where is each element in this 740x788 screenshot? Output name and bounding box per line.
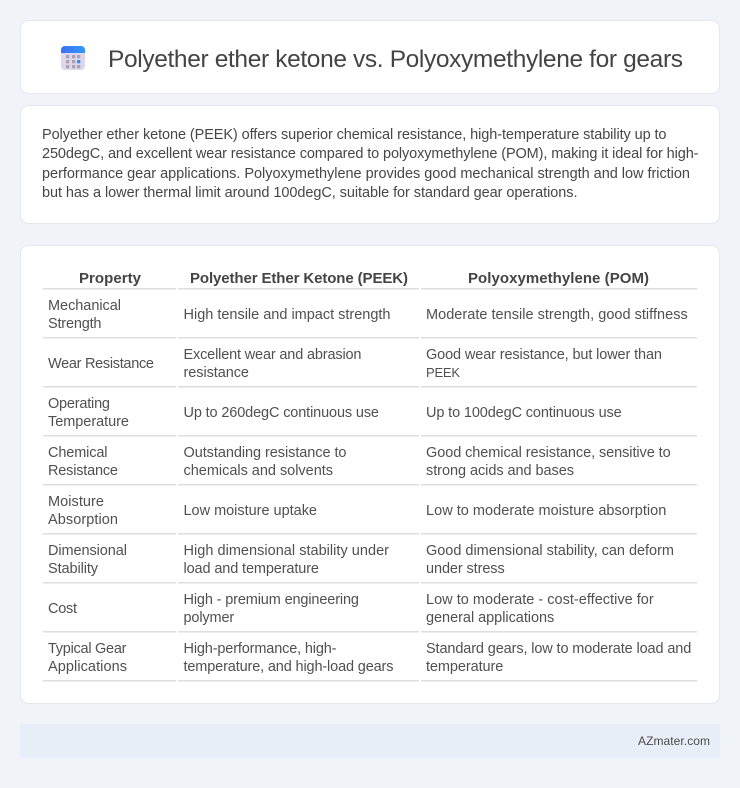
- row: chemical resistance: Outstanding resistance to: [184, 445, 346, 461]
- row: wear resistance: Wear Resistance: [48, 356, 154, 372]
- row: wear resistance: resistance: [184, 365, 249, 381]
- row: operating temperature: Up to 260degC continuous use: [184, 405, 379, 421]
- row: mechanical strength: Mechanical: [48, 298, 121, 314]
- table header row: Property: [79, 270, 142, 287]
- row: cost: High - premium engineering: [184, 592, 359, 608]
- title: Polyether ether ketone vs. Polyoxymethylene for gears: [108, 46, 683, 73]
- row: mechanical strength: Strength: [48, 316, 102, 332]
- row: mechanical strength: Moderate tensile strength, good stiffness: [426, 307, 688, 323]
- row: moisture absorption: Moisture: [48, 494, 104, 510]
- footer credit: AZmater.com: [638, 734, 710, 748]
- row: dimensional stability: Good dimensional stability, can deform: [426, 543, 674, 559]
- row: moisture absorption: Low moisture uptake: [184, 503, 317, 519]
- row: typical gear applications: Typical Gear: [48, 641, 127, 657]
- row: wear resistance: Good wear resistance, but lower than: [426, 347, 662, 363]
- row: dimensional stability: load and temperature: [184, 561, 319, 577]
- row: typical gear applications: Applications: [48, 659, 127, 675]
- row: operating temperature: Temperature: [48, 414, 129, 430]
- row: cost: polymer: [184, 610, 234, 626]
- row: chemical resistance: [43, 445, 697, 486]
- row: moisture absorption: Absorption: [48, 512, 118, 528]
- row: wear resistance: Excellent wear and abrasion: [184, 347, 362, 363]
- row: dimensional stability: [43, 543, 697, 584]
- summary paragraph: but has a lower thermal limit around 100degC, suitable for standard gear operations.: [42, 185, 578, 201]
- table header row: Polyoxymethylene (POM): [468, 270, 649, 287]
- row: cost: Low to moderate - cost-effective for: [426, 592, 654, 608]
- row: operating temperature: Up to 100degC continuous use: [426, 405, 622, 421]
- row: typical gear applications: Standard gears, low to moderate load and: [426, 641, 691, 657]
- row: moisture absorption: Low to moderate moisture absorption: [426, 503, 666, 519]
- row: chemical resistance: Chemical: [48, 445, 108, 461]
- row: typical gear applications: temperature: [426, 659, 503, 675]
- icon: calendar: [61, 46, 85, 70]
- title card: [20, 20, 720, 94]
- table header row: Polyether Ether Ketone (PEEK): [190, 270, 408, 287]
- summary card: [20, 106, 720, 224]
- row: typical gear applications: High-performance, high-: [184, 641, 337, 657]
- row: typical gear applications: temperature, and high-load gears: [184, 659, 394, 675]
- comparison table card: [20, 246, 720, 704]
- row: cost: [43, 592, 697, 632]
- row: dimensional stability: under stress: [426, 561, 505, 577]
- summary paragraph: performance gear applications. Polyoxymethylene provides good mechanical strength and low friction: [42, 166, 690, 182]
- summary paragraph: [42, 127, 699, 201]
- row: operating temperature: Operating: [48, 396, 110, 412]
- row: dimensional stability: Dimensional: [48, 543, 127, 559]
- row: typical gear applications: [43, 641, 697, 682]
- footer bar: [20, 724, 720, 758]
- row: cost: Cost: [48, 601, 77, 617]
- row: wear resistance: [43, 347, 697, 388]
- row: chemical resistance: Resistance: [48, 463, 118, 479]
- row: chemical resistance: strong acids and bases: [426, 463, 574, 479]
- row: cost: general applications: [426, 610, 554, 626]
- row: chemical resistance: chemicals and solvents: [184, 463, 333, 479]
- table header row: [43, 270, 697, 290]
- row: dimensional stability: High dimensional stability under: [184, 543, 389, 559]
- row: moisture absorption: [43, 494, 697, 534]
- row: chemical resistance: Good chemical resistance, sensitive to: [426, 445, 671, 461]
- summary paragraph: Polyether ether ketone (PEEK) offers superior chemical resistance, high-temperature stability up to: [42, 127, 666, 143]
- row: mechanical strength: High tensile and impact strength: [184, 307, 390, 323]
- row: operating temperature: [43, 396, 697, 436]
- row: dimensional stability: Stability: [48, 561, 99, 577]
- summary paragraph: 250degC, and excellent wear resistance compared to polyoxymethylene (POM), making it ideal for high-: [42, 146, 699, 162]
- row: wear resistance: PEEK: [426, 365, 460, 380]
- row: mechanical strength: [43, 298, 697, 338]
